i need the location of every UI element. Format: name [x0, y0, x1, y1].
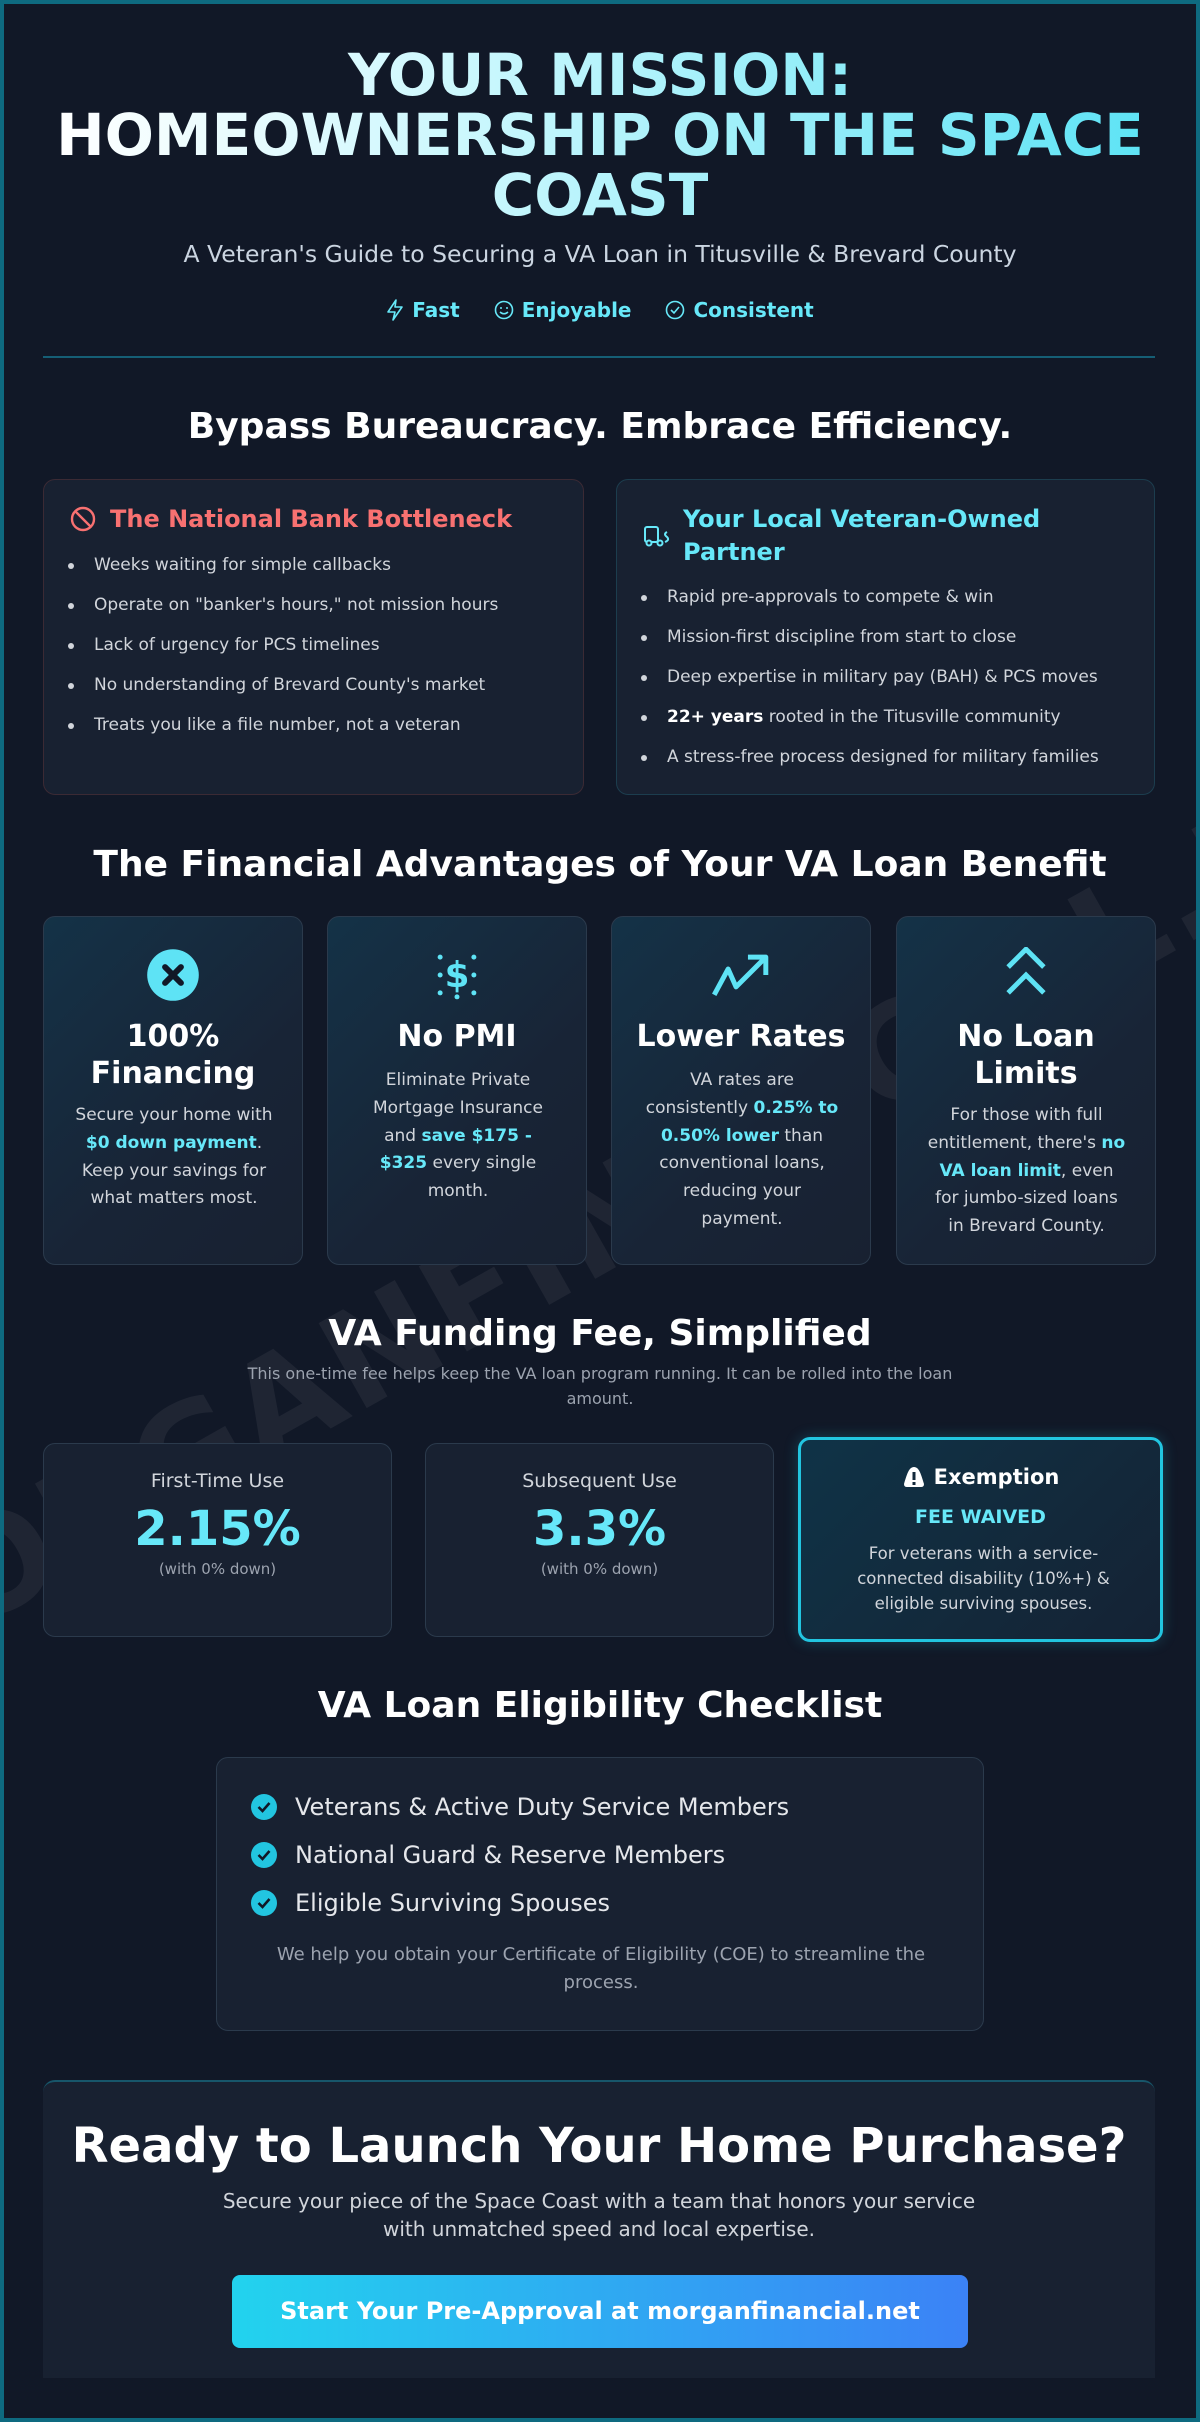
card: lower rates [611, 916, 871, 1265]
card: 100% financing: 100% [127, 1019, 219, 1054]
card: no loan limits [896, 916, 1156, 1265]
title: COAST [492, 161, 708, 229]
tag: fast [387, 298, 460, 322]
list: Weeks waiting for simple callbacks [94, 555, 391, 575]
funding fee subtitle: This one-time fee helps keep the VA loan program running. It can be rolled into the loan amount. [248, 1364, 952, 1408]
card: 100% financing [43, 916, 303, 1265]
fee card: first-time [43, 1443, 392, 1637]
fee card: first-time: 2.15% [134, 1501, 301, 1557]
card: 100% financing: Financing [91, 1056, 255, 1091]
panel title: Partner [683, 538, 785, 566]
panel: checklist [216, 1757, 984, 2031]
cta title: Ready to Launch Your Home Purchase? [72, 2118, 1126, 2174]
icon: x circle [147, 949, 199, 1001]
fee card: subsequent: (with 0% down) [541, 1560, 658, 1578]
list: Mission-first discipline from start to close [667, 627, 1016, 647]
list: A stress-free process designed for military families [667, 747, 1099, 767]
list [641, 587, 1099, 767]
card: lower rates: VA rates are consistently 0.25% to 0.50% lower than conventional loans, reducing your payment. [646, 1070, 838, 1229]
exemption title: Exemption [934, 1465, 1059, 1489]
fee card: subsequent: 3.3% [533, 1501, 666, 1557]
panel title: The National Bank Bottleneck [110, 505, 512, 533]
tags [387, 298, 814, 322]
heading: bypass: Bypass Bureaucracy. Embrace Efficiency. [188, 406, 1012, 447]
heading: funding fee: VA Funding Fee, Simplified [328, 1313, 872, 1354]
title: YOUR MISSION: [348, 41, 852, 109]
list: Treats you like a file number, not a veteran [94, 715, 461, 735]
card: lower rates: Lower Rates [637, 1019, 845, 1054]
cta button [232, 2275, 968, 2348]
panel: local partner [616, 479, 1155, 795]
list: 22+ years rooted in the Titusville community [667, 707, 1061, 727]
list: Deep expertise in military pay (BAH) & PCS moves [667, 667, 1098, 687]
icon: dollar [438, 954, 476, 1000]
checklist note: We help you obtain your Certificate of Eligibility (COE) to streamline the process. [277, 1944, 925, 1993]
checklist items: National Guard & Reserve Members [295, 1841, 725, 1869]
icon: trend [712, 954, 768, 996]
card: no loan limits: For those with full entitlement, there's no VA loan limit, even for jumbo-sized loans in Brevard County. [928, 1105, 1125, 1236]
card: no pmi: Eliminate Private Mortgage Insurance and save $175 - $325 every single month. [373, 1070, 543, 1201]
fee card: subsequent [425, 1443, 774, 1637]
card: 100% financing: Secure your home with $0 down payment. Keep your savings for what matters most. [75, 1105, 273, 1208]
list: Lack of urgency for PCS timelines [94, 635, 380, 655]
tag: enjoyable: Enjoyable [522, 298, 631, 322]
cta text: Secure your piece of the Space Coast with a team that honors your service with unmatched speed and local expertise. [223, 2189, 975, 2241]
fee card: subsequent: Subsequent Use [522, 1470, 677, 1492]
heading: eligibility: VA Loan Eligibility Checklist [318, 1685, 882, 1726]
icon: double chevron [1006, 947, 1046, 995]
panel: call to action [43, 2080, 1155, 2378]
list [68, 555, 498, 735]
card: no loan limits: No Loan [957, 1019, 1095, 1054]
fee card: exemption: For veterans with a service-connected disability (10%+) & eligible surviving spouses. [857, 1544, 1110, 1613]
tag: fast: Fast [412, 298, 460, 322]
panel title [644, 505, 1040, 566]
title: HOMEOWNERSHIP ON THE SPACE [56, 101, 1144, 169]
card: no loan limits: Limits [974, 1056, 1078, 1091]
tag: consistent: Consistent [693, 298, 814, 322]
icon: dollar: $ [445, 955, 469, 996]
subtitle: A Veteran's Guide to Securing a VA Loan in Titusville & Brevard County [183, 240, 1017, 268]
list: Operate on "banker's hours," not mission hours [94, 595, 498, 615]
panel title: Your Local Veteran-Owned [683, 505, 1040, 533]
fee card: exemption [798, 1437, 1163, 1642]
panel: national bank [43, 479, 584, 795]
checklist items: Veterans & Active Duty Service Members [295, 1793, 789, 1821]
heading: financial advantages: The Financial Advantages of Your VA Loan Benefit [93, 844, 1107, 885]
card: no pmi: No PMI [397, 1019, 517, 1054]
fee card: first-time: (with 0% down) [159, 1560, 276, 1578]
fee card: first-time: First-Time Use [151, 1470, 284, 1492]
checklist items [251, 1793, 789, 1917]
card: no pmi [327, 916, 587, 1265]
title [56, 41, 1144, 229]
list: No understanding of Brevard County's market [94, 675, 485, 695]
list: Rapid pre-approvals to compete & win [667, 587, 994, 607]
fee card: exemption: FEE WAIVED [915, 1506, 1046, 1528]
checklist items: Eligible Surviving Spouses [295, 1889, 610, 1917]
cta button: Start Your Pre-Approval at morganfinancial.net [280, 2297, 920, 2325]
